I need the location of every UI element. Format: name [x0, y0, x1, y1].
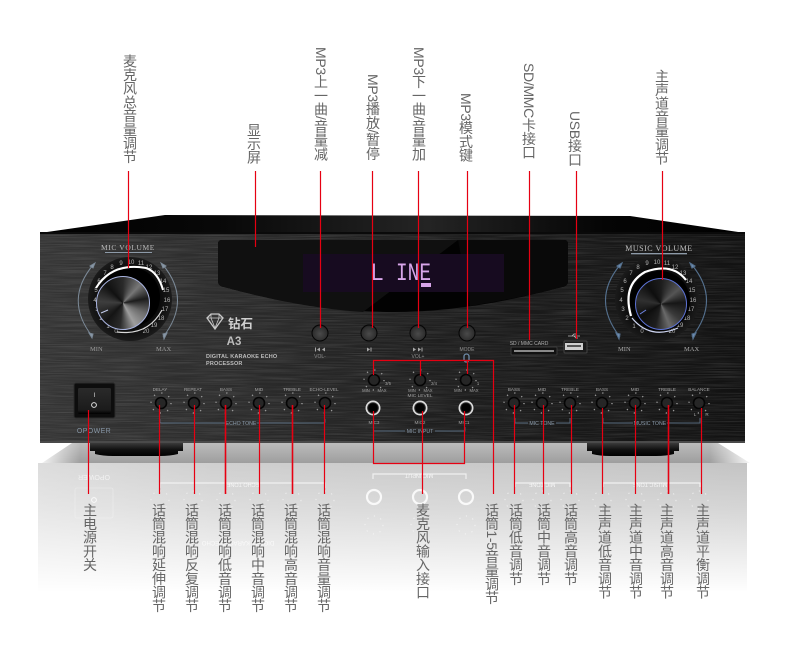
mic volume scale numbers [93, 260, 171, 335]
label: power switch: 主电源开关 [82, 503, 98, 572]
mic tone bracket: MIC TONE [529, 421, 555, 427]
mic tone knobs: MID [538, 387, 547, 392]
mic volume scale numbers: 15 [163, 288, 170, 294]
echo tone knobs: TREBLE [283, 387, 301, 392]
label: display: 显示屏 [246, 123, 262, 164]
mic volume scale numbers: 6 [97, 279, 101, 285]
echo tone bracket [160, 419, 325, 427]
red callout lines top [128, 171, 662, 340]
music tone knobs: BASS [596, 387, 608, 392]
mp3 buttons: VOL- [314, 354, 326, 360]
feet [90, 443, 679, 456]
min max labels left: MAX [156, 346, 171, 353]
mic volume title: MIC VOLUME [101, 243, 155, 252]
music volume title: MUSIC VOLUME [625, 244, 693, 253]
music volume scale numbers: 15 [689, 288, 696, 294]
power label: OPOWER [77, 428, 111, 435]
brand logo: PROCESSOR [206, 361, 242, 367]
echo tone knobs: DELAY [153, 387, 167, 392]
mic tone knobs: BASS [508, 387, 520, 392]
label: mic treble: 话筒高音调节 [563, 503, 579, 585]
mic volume knob cap [96, 276, 150, 330]
label: echo treble: 话筒混响高音调节 [283, 503, 299, 613]
music volume scale numbers: 16 [690, 298, 697, 304]
music volume scale numbers: 13 [680, 271, 687, 277]
label: echo delay: 话筒混响延伸调节 [151, 503, 167, 613]
mic input jacks [366, 400, 474, 435]
mic volume arcs [78, 263, 178, 339]
display readout [370, 259, 431, 288]
mic volume scale numbers: 4 [93, 298, 97, 304]
label: mic bass: 话筒低音调节 [508, 503, 524, 585]
echo tone knobs [151, 387, 339, 427]
reflected panel details: ECHO TONE [226, 481, 259, 487]
label: music mid: 主声道中音调节 [628, 503, 644, 599]
min max labels left [90, 346, 171, 353]
music volume scale numbers: 11 [664, 261, 671, 267]
music volume scale numbers: 7 [629, 271, 633, 277]
amplifier top surface [40, 215, 745, 233]
reflected panel details: MUSIC TONE [633, 481, 667, 487]
mic level knobs: MAX [423, 388, 433, 393]
mp3 buttons: VOL+ [412, 354, 425, 360]
brand logo [206, 314, 278, 367]
mp3 buttons [312, 325, 475, 362]
mic input bracket: MIC INPUT [407, 429, 434, 435]
display level meter [421, 283, 431, 287]
music volume pointer [640, 310, 646, 314]
music volume scale numbers: 20 [669, 329, 676, 335]
music tone knobs: TREBLE [658, 387, 676, 392]
label: usb: USB接口 [567, 111, 583, 166]
mic level knobs [362, 370, 480, 399]
label: music treble: 主声道高音调节 [659, 503, 675, 599]
music volume knob cap [635, 278, 689, 332]
power switch [74, 383, 115, 435]
reflected panel details: MIC INPUT [404, 472, 433, 478]
label: mp3 previous: MP3上一曲/音量减 [313, 47, 329, 161]
echo tone knobs: REPEAT [184, 387, 202, 392]
music volume scale numbers: 2 [625, 316, 629, 322]
red callout lines bottom [88, 360, 702, 494]
mic volume scale numbers: 3 [95, 307, 99, 313]
mic volume scale numbers: 2 [99, 316, 103, 322]
brand logo: 钻石 [228, 316, 253, 331]
mic volume scale numbers: 0 [114, 329, 118, 335]
min max labels right [618, 346, 699, 353]
echo tone knobs: MID [255, 387, 264, 392]
mic volume dial [88, 257, 172, 341]
music volume scale numbers: 6 [623, 279, 627, 285]
label: mp3 mode: MP3模式键 [458, 93, 474, 162]
mic level knobs: MAX [469, 388, 479, 393]
mic volume scale numbers: 12 [146, 265, 153, 271]
mic volume scale numbers: 5 [94, 288, 98, 294]
music tone bracket: MUSIC TONE [634, 421, 667, 427]
sd card slot [510, 341, 557, 355]
music volume scale numbers: 1 [632, 324, 636, 330]
music volume scale numbers: 3 [621, 307, 625, 313]
music volume scale numbers: 0 [640, 329, 644, 335]
mic volume scale numbers: 13 [154, 271, 161, 277]
label: sd card: SD/MMC卡接口 [521, 63, 537, 159]
label: mp3 play pause: MP3播放/暂停 [365, 74, 381, 160]
brand logo: DIGITAL KARAOKE ECHO [206, 354, 278, 360]
label: master volume: 主声道音量调节 [654, 69, 670, 165]
music tone knobs: BALANCE [688, 387, 710, 392]
music volume scale numbers: 4 [619, 298, 623, 304]
reflected panel details [75, 472, 708, 545]
music volume arcs [606, 263, 706, 339]
music volume scale numbers: 14 [686, 279, 693, 285]
reflected panel details: OPOWER [78, 473, 110, 480]
echo tone bracket: ECHO TONE [226, 421, 257, 427]
mic level knobs: 3/5 [385, 381, 392, 386]
music tone knobs: MID [631, 387, 640, 392]
min max labels right: MIN [618, 346, 631, 353]
mic volume scale numbers: 18 [158, 316, 165, 322]
music volume scale numbers: 10 [654, 260, 661, 266]
mic volume scale numbers: 7 [103, 271, 107, 277]
reflected panel details: MIC TONE [528, 481, 555, 487]
label: echo mid: 话筒混响中音调节 [250, 503, 266, 613]
mic level knobs: 1 [477, 381, 480, 386]
mic level knobs: MIN [362, 388, 370, 393]
display readout: L [370, 259, 384, 288]
min max labels left: MIN [90, 346, 103, 353]
mic level knobs: MIC LEVEL [407, 393, 433, 399]
label: echo repeat: 话筒混响反复调节 [184, 503, 200, 613]
music volume scale numbers: 18 [684, 316, 691, 322]
sd card slot: SD / MMC CARD [510, 341, 549, 347]
label: echo level: 话筒混响音量调节 [316, 503, 332, 613]
mic volume scale numbers: 20 [143, 329, 150, 335]
mic volume pointer [101, 310, 108, 313]
min max labels right: MAX [684, 346, 699, 353]
mic input jacks: MIC3 [369, 420, 380, 425]
mic tone knobs: TREBLE [561, 387, 579, 392]
mic volume scale numbers: 17 [162, 307, 169, 313]
music volume scale numbers: 12 [672, 265, 679, 271]
mic level knobs: MAX [377, 388, 387, 393]
mp3 buttons: MODE [460, 347, 475, 353]
mic volume scale numbers: 11 [138, 261, 145, 267]
label: mic mid: 话筒中音调节 [536, 503, 552, 585]
red mic level bracket [374, 360, 494, 494]
mic volume scale numbers: 10 [128, 260, 135, 266]
music tone knobs [592, 387, 710, 427]
label: mic level: 话筒1-5音量调节 [484, 503, 500, 605]
label: mic master volume: 麦克风总音量调节 [122, 54, 138, 164]
mic volume scale numbers: 19 [151, 323, 158, 329]
music volume scale numbers: 9 [645, 261, 649, 267]
echo tone knobs: BASS [220, 387, 232, 392]
display readout: INE [396, 259, 431, 288]
reflected panel details: DIGITAL KARAOKE ECHO [201, 539, 274, 545]
echo tone knobs: ECHO-LEVEL [309, 387, 339, 392]
label: mp3 next: MP3下一曲/音量加 [411, 47, 427, 161]
shadow band under amplifier [36, 443, 754, 463]
mic tone knobs [504, 387, 580, 427]
usb port [564, 334, 587, 353]
front panel [40, 232, 745, 443]
mic input jacks: MIC2 [415, 420, 426, 425]
mic level knobs: MIN [454, 388, 462, 393]
label: music bass: 主声道低音调节 [597, 503, 613, 599]
power switch: I [94, 393, 96, 399]
music volume dial [615, 257, 699, 341]
mic level knobs: 2/4 [431, 381, 438, 386]
music volume scale numbers [619, 260, 697, 335]
mic level knobs: MIN [408, 388, 416, 393]
music volume scale numbers: 5 [620, 288, 624, 294]
mic volume scale numbers: 8 [110, 265, 114, 271]
music volume scale numbers: 17 [688, 307, 695, 313]
mic volume scale numbers: 16 [164, 298, 171, 304]
label: balance: 主声道平衡调节 [695, 503, 711, 599]
mic volume scale numbers: 14 [160, 279, 167, 285]
music volume scale numbers: 8 [636, 265, 640, 271]
music volume scale numbers: 19 [677, 323, 684, 329]
brand logo: A3 [227, 336, 241, 348]
label: mic input: 麦克风输入接口 [415, 503, 431, 599]
mic input jacks: MIC1 [459, 420, 470, 425]
mic volume scale numbers: 9 [119, 261, 123, 267]
display screen [218, 240, 568, 312]
mic volume scale numbers: 1 [106, 324, 110, 330]
music tone knobs: L [694, 412, 697, 417]
table reflection [36, 443, 754, 593]
red mic input bracket [374, 411, 464, 494]
music tone knobs: R [705, 412, 709, 417]
label: echo bass: 话筒混响低音调节 [217, 503, 233, 613]
